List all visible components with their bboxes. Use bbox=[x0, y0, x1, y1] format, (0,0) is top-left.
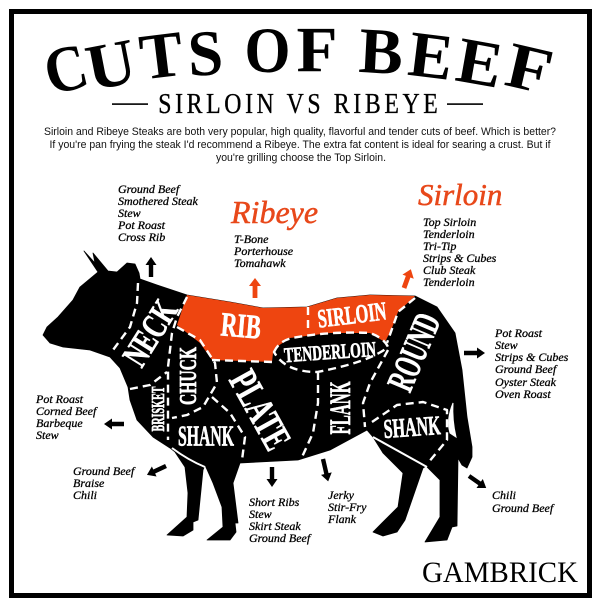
cut labels: ROUND bbox=[380, 307, 449, 397]
plate cuts list: Short Ribs bbox=[249, 495, 300, 509]
sirloin cuts list: Strips & Cubes bbox=[423, 251, 497, 265]
brisket cuts list bbox=[35, 392, 98, 442]
ribeye cuts list: Tomahawk bbox=[234, 256, 286, 270]
intro paragraph bbox=[44, 126, 556, 164]
title: B bbox=[357, 15, 405, 89]
cut labels: SHANK bbox=[383, 410, 441, 444]
cut labels: CHUCK bbox=[176, 347, 202, 405]
arrow: round right bbox=[464, 348, 485, 358]
flank cuts list bbox=[327, 488, 367, 526]
cut labels: SHANK bbox=[178, 420, 234, 452]
plate cuts list: Stew bbox=[249, 507, 272, 521]
arrow: plate down bbox=[266, 467, 278, 487]
sirloin cuts list: Tri-Tip bbox=[423, 239, 456, 253]
plate cuts list: Ground Beef bbox=[249, 531, 312, 545]
cut labels bbox=[114, 293, 449, 457]
round cuts list bbox=[494, 326, 569, 401]
plate cuts list bbox=[249, 495, 312, 545]
ribeye cuts list: Porterhouse bbox=[233, 244, 294, 258]
front shank cuts list: Chili bbox=[73, 488, 97, 502]
dashed cut lines bbox=[113, 283, 447, 463]
arrow: hind shank bbox=[466, 471, 489, 493]
intro paragraph: If you're pan frying the steak I'd recommend a Ribeye. The extra fat content is ideal for searing a crust. But if bbox=[50, 139, 551, 151]
intro paragraph: Sirloin and Ribeye Steaks are both very popular, high quality, flavorful and tender cuts of beef. Which is better? bbox=[44, 126, 556, 138]
brisket cuts list: Stew bbox=[36, 428, 59, 442]
neck cuts list: Ground Beef bbox=[118, 182, 181, 196]
round cuts list: Oyster Steak bbox=[495, 375, 557, 389]
arrow: brisket left bbox=[104, 418, 124, 430]
title: E bbox=[451, 24, 508, 103]
intro paragraph: you're grilling choose the Top Sirloin. bbox=[216, 152, 386, 164]
leg highlights bbox=[172, 403, 456, 467]
flank cuts list: Jerky bbox=[328, 488, 355, 502]
hind shank cuts list: Chili bbox=[492, 488, 516, 502]
arrow: flank down bbox=[318, 458, 334, 483]
cut labels: SIRLOIN bbox=[316, 296, 388, 334]
sirloin cuts list: Club Steak bbox=[423, 263, 476, 277]
cut labels: PLATE bbox=[220, 362, 300, 457]
cow silhouette bbox=[43, 251, 472, 542]
brand: Gambrick: GAMBRICK bbox=[422, 556, 578, 589]
plate cuts list: Skirt Steak bbox=[249, 519, 301, 533]
round cuts list: Stew bbox=[495, 338, 518, 352]
title: U bbox=[80, 25, 142, 105]
arrow: ribeye up bbox=[249, 278, 261, 298]
subtitle: SIRLOIN VS RIBEYE bbox=[158, 87, 438, 120]
round cuts list: Strips & Cubes bbox=[495, 350, 569, 364]
cut labels: BRISKET bbox=[148, 386, 168, 432]
title bbox=[37, 14, 559, 110]
hind shank cuts list: Ground Beef bbox=[492, 501, 555, 515]
arrow: neck up bbox=[146, 257, 156, 277]
title: T bbox=[136, 18, 187, 95]
title: C bbox=[37, 30, 95, 110]
round cuts list: Oven Roast bbox=[495, 387, 551, 401]
title: S bbox=[186, 17, 225, 91]
ribeye cuts list bbox=[233, 232, 294, 270]
ribeye cuts list: T-Bone bbox=[234, 232, 269, 246]
cut labels: FLANK bbox=[324, 381, 357, 435]
heading: Ribeye: Ribeye bbox=[230, 194, 318, 230]
brisket cuts list: Barbeque bbox=[36, 416, 83, 430]
brisket cuts list: Pot Roast bbox=[35, 392, 84, 406]
front shank cuts list: Braise bbox=[73, 476, 105, 490]
flank cuts list: Flank bbox=[327, 512, 357, 526]
brisket cuts list: Corned Beef bbox=[36, 404, 98, 418]
title: F bbox=[499, 29, 559, 109]
cut labels: NECK bbox=[114, 293, 186, 373]
hind shank cuts list bbox=[492, 488, 555, 515]
sirloin cuts list: Top Sirloin bbox=[423, 215, 476, 229]
round cuts list: Pot Roast bbox=[494, 326, 543, 340]
neck cuts list: Pot Roast bbox=[117, 218, 166, 232]
title: O bbox=[244, 15, 290, 87]
sirloin cuts list: Tenderloin bbox=[423, 275, 475, 289]
heading: Sirloin: Sirloin bbox=[418, 177, 502, 212]
neck cuts list: Cross Rib bbox=[118, 230, 165, 244]
cut labels: RIB bbox=[219, 306, 262, 347]
beef cow diagram bbox=[43, 251, 472, 542]
title: E bbox=[405, 18, 457, 95]
round cuts list: Ground Beef bbox=[495, 362, 558, 376]
title: F bbox=[296, 14, 338, 86]
flank cuts list: Stir-Fry bbox=[328, 500, 367, 514]
front shank cuts list bbox=[73, 464, 136, 502]
sirloin cuts list bbox=[423, 215, 497, 289]
front shank cuts list: Ground Beef bbox=[73, 464, 136, 478]
orange prime cuts: rib and sirloin bbox=[177, 295, 415, 362]
arrow: front shank bbox=[145, 461, 168, 480]
cut labels: TENDERLOIN bbox=[283, 337, 377, 367]
neck cuts list bbox=[117, 182, 199, 244]
neck cuts list: Smothered Steak bbox=[118, 194, 199, 208]
neck cuts list: Stew bbox=[118, 206, 141, 220]
arrow: sirloin up bbox=[398, 267, 416, 290]
sirloin cuts list: Tenderloin bbox=[423, 227, 475, 241]
